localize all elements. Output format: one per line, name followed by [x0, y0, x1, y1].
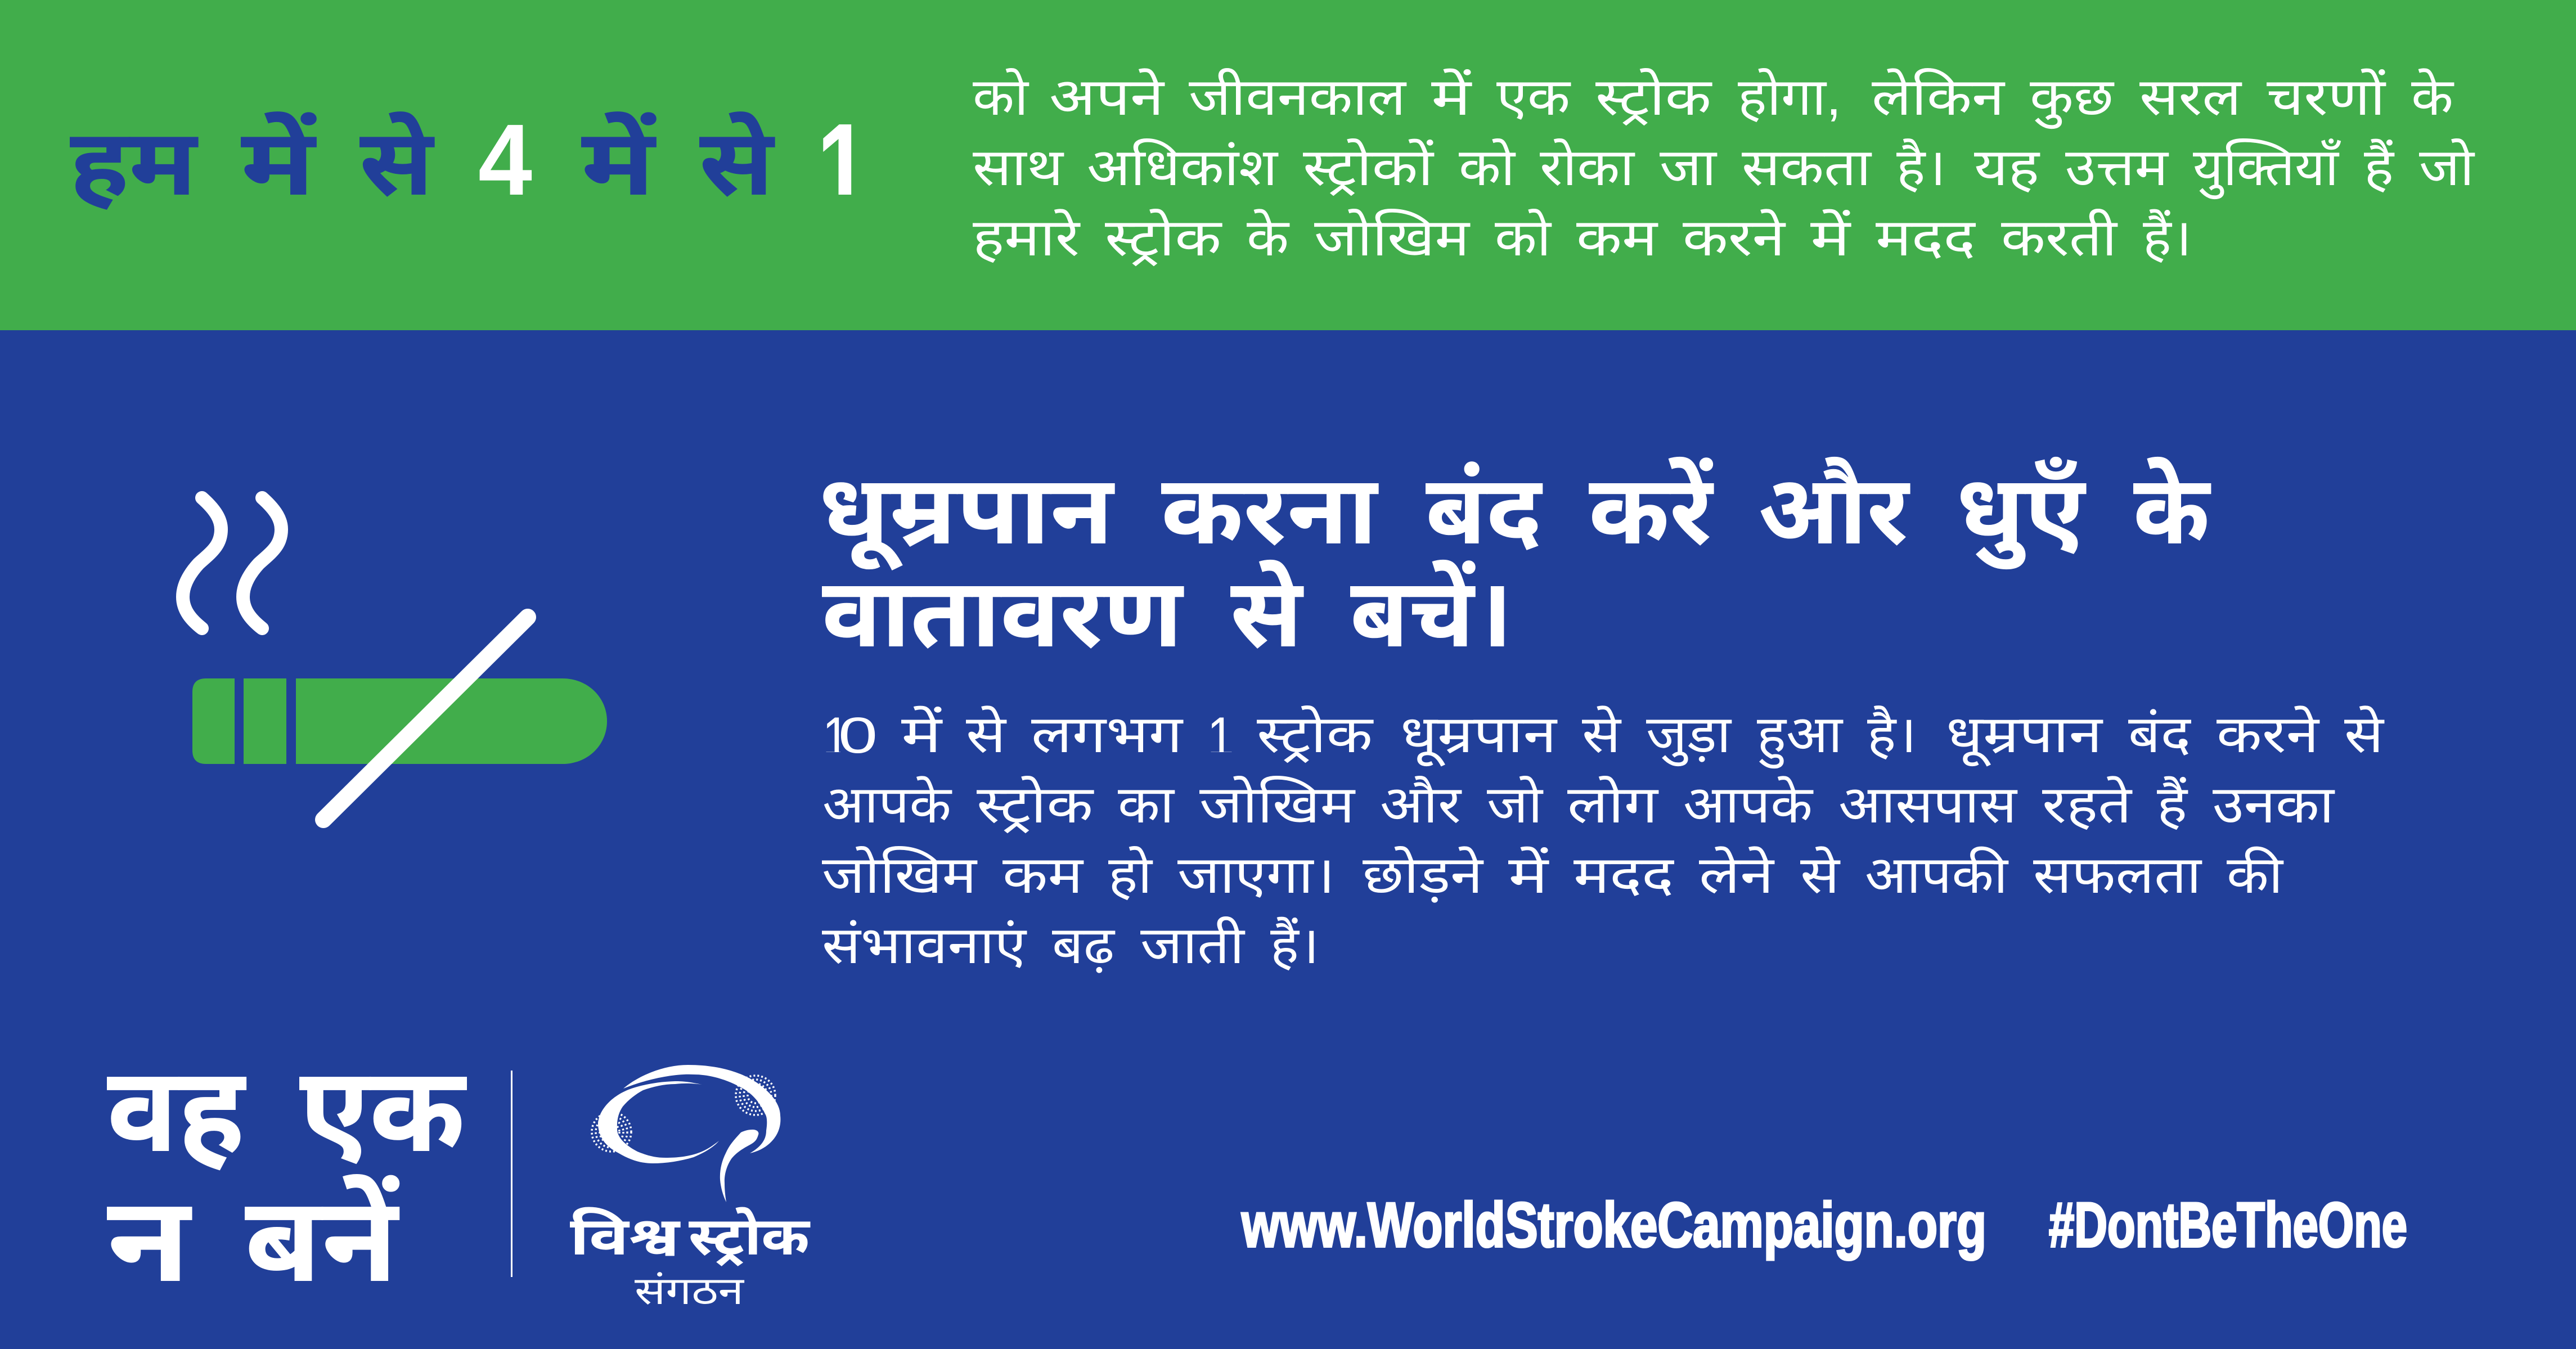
text block: intro: कुछ	[2030, 69, 2115, 129]
website url: www.WorldStrokeCampaign.org	[1241, 1190, 1986, 1260]
text block: intro: स्ट्रोकों	[1303, 138, 1435, 196]
text block: body: आसपास	[1838, 776, 2018, 834]
heading: quit smoking: धूम्रपान	[819, 456, 1115, 570]
icon: no smoking cigarette	[183, 498, 607, 820]
slogan: don't be the one: वह	[107, 1043, 247, 1176]
slogan: don't be the one: एक	[299, 1043, 467, 1176]
text block: intro: करती	[2001, 209, 2118, 267]
heading: 1 in 4 of us	[70, 111, 852, 210]
text block: intro: के	[1247, 209, 1290, 267]
text block: body: की	[2227, 846, 2284, 904]
heading: quit smoking	[819, 456, 2211, 667]
text block: intro: रोका	[1540, 139, 1635, 196]
heading: 1 in 4 of us: 4	[478, 104, 532, 217]
text block: intro: स्ट्रोक	[1595, 69, 1713, 126]
text block: body: 1	[822, 705, 849, 768]
text block: intro: हैं।	[2143, 209, 2192, 267]
text block: intro: को	[1495, 209, 1552, 267]
heading: quit smoking: बंद	[1426, 456, 1543, 564]
heading: 1 in 4 of us: से	[699, 111, 775, 214]
text block: body: जुड़ा	[1646, 706, 1732, 766]
logo text: स्ट्रोक	[689, 1207, 811, 1267]
text block: body: और	[1380, 776, 1463, 834]
logo: World Stroke Organization	[570, 1065, 811, 1312]
text block: intro: के	[2411, 69, 2454, 126]
panel: green top band	[0, 0, 2576, 330]
text block: body: स्ट्रोक	[977, 776, 1095, 834]
text block: body: रहते	[2042, 776, 2133, 834]
text block: intro: सरल	[2139, 69, 2242, 126]
text block: body: स्ट्रोक	[1257, 706, 1374, 763]
text block: body: जोखिम	[822, 847, 978, 904]
text block: body: आपके	[822, 776, 952, 834]
text block: intro: सकता	[1742, 139, 1872, 196]
heading: quit smoking: वातावरण	[822, 559, 1184, 667]
text block: body: से	[2344, 706, 2385, 763]
text block: body: उनका	[2213, 776, 2335, 834]
text block: body: से	[966, 706, 1007, 763]
heading: 1 in 4 of us: 1	[817, 98, 869, 237]
text block: intro: हमारे	[973, 209, 1081, 267]
text block: intro: स्ट्रोक	[1105, 209, 1223, 267]
text block: body: 1	[1207, 705, 1234, 768]
text block: body: में	[1508, 846, 1550, 904]
text block: intro: कम	[1576, 209, 1658, 267]
text block: intro: अपने	[1049, 69, 1165, 126]
text block: body: से	[1800, 847, 1841, 904]
text block: intro: साथ	[973, 139, 1064, 196]
slogan: don't be the one: बनें	[245, 1173, 400, 1306]
text block: intro: करने	[1683, 209, 1786, 267]
text block: intro: चरणों	[2267, 68, 2386, 126]
text block: body: लगभग	[1031, 706, 1184, 763]
text block: intro: उत्तम	[2065, 139, 2169, 196]
text block: body: सफलता	[2033, 847, 2202, 904]
text block: body: जाती	[1140, 917, 1246, 974]
heading: quit smoking: धुएँ	[1956, 456, 2087, 569]
text block: intro: मदद	[1876, 209, 1976, 267]
icon: strike line	[323, 617, 528, 820]
text block: body: हैं।	[1270, 916, 1319, 974]
text block: body: से	[1582, 706, 1622, 763]
text block: body: में	[901, 705, 943, 763]
logo text	[570, 1207, 811, 1312]
text block: body: मदद	[1574, 847, 1674, 904]
text block: body: का	[1118, 776, 1175, 834]
text block: intro: में	[1431, 68, 1473, 126]
text block: body: छोड़ने	[1363, 847, 1484, 904]
icon: cigarette body	[192, 678, 607, 764]
heading: quit smoking: करना	[1161, 456, 1379, 564]
text block: intro: युक्तियाँ	[2193, 138, 2341, 199]
text block: body: लेने	[1699, 847, 1775, 904]
text block: body: जाएगा।	[1177, 847, 1335, 904]
text block: intro: जा	[1660, 139, 1718, 196]
heading: 1 in 4 of us: हम	[70, 111, 199, 214]
text block: intro: में	[1810, 209, 1852, 267]
text block: body: आपकी	[1865, 846, 2009, 904]
text block: intro: को	[1459, 139, 1516, 196]
text block: intro: होगा,	[1738, 69, 1841, 126]
heading: quit smoking: और	[1758, 456, 1910, 564]
heading: quit smoking: बचें।	[1350, 559, 1512, 667]
text block: body: हैं	[2157, 776, 2188, 834]
heading: 1 in 4 of us: में	[241, 111, 317, 214]
text block: body: आपके	[1683, 776, 1814, 834]
text block: body: बंद	[2128, 706, 2191, 763]
text block: intro: जीवनकाल	[1189, 69, 1407, 126]
slogan: don't be the one	[107, 1043, 467, 1306]
text block: body: करने	[2217, 706, 2320, 763]
text block: intro: है।	[1896, 139, 1946, 196]
heading: quit smoking: करें	[1589, 456, 1714, 564]
text block: body: जो	[1487, 776, 1544, 834]
slogan: don't be the one: न	[107, 1173, 192, 1306]
text block: intro: हैं	[2364, 138, 2395, 196]
logo text: संगठन	[635, 1270, 744, 1312]
heading: 1 in 4 of us: से	[359, 111, 435, 214]
logo mark: stipple texture	[592, 1076, 775, 1152]
logo text: विश्व	[570, 1207, 681, 1266]
icon: smoke wisps	[183, 498, 281, 628]
text block: body: कम	[1002, 847, 1084, 904]
text block: intro: अधिकांश	[1087, 139, 1279, 196]
text block: body: जोखिम	[1199, 776, 1356, 834]
text block: intro: लेकिन	[1872, 69, 2006, 126]
text block: body: धूम्रपान	[1946, 706, 2103, 767]
text block: body: है।	[1867, 706, 1917, 763]
text block: body: लोग	[1567, 776, 1660, 834]
text block: body: धूम्रपान	[1400, 706, 1558, 767]
text block: body	[822, 705, 2385, 974]
heading: quit smoking: से	[1230, 559, 1304, 667]
text block: body: संभावनाएं	[822, 917, 1027, 974]
text block: intro: जो	[2419, 139, 2475, 196]
text block: body: हो	[1108, 847, 1153, 904]
heading: quit smoking: के	[2133, 456, 2211, 564]
divider	[511, 1071, 512, 1277]
text block: body: 0	[838, 708, 878, 764]
text block: body: बढ़	[1052, 917, 1116, 974]
text block: intro: जोखिम	[1314, 209, 1471, 267]
hashtag: #DontBeTheOne	[2049, 1190, 2407, 1260]
text block: intro: को	[973, 69, 1029, 126]
text block: intro: यह	[1974, 139, 2040, 196]
text block: intro: एक	[1496, 69, 1572, 126]
heading: 1 in 4 of us: में	[581, 111, 657, 214]
text block: intro	[973, 68, 2475, 267]
text block: body: हुआ	[1757, 706, 1844, 769]
logo mark: brain swoosh	[598, 1065, 780, 1202]
